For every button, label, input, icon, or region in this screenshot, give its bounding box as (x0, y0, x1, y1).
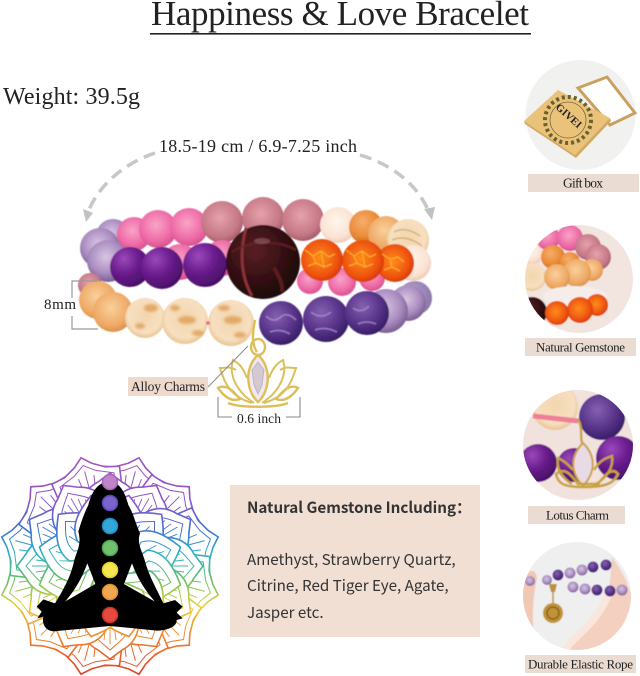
center tiger eye bead (226, 225, 300, 299)
natural gemstone label (525, 338, 636, 356)
back strand beads (80, 197, 431, 296)
lower strand beads (78, 273, 432, 346)
gift box image: GIVEI (553, 102, 583, 131)
lotus charm label (528, 506, 625, 524)
meditating silhouette (37, 482, 183, 631)
length dimension label: 18.5-19 cm / 6.9-7.25 inch (159, 136, 357, 156)
chakra dots (102, 474, 118, 622)
alloy charms callout: Alloy Charms (131, 379, 205, 394)
lotus charm close-up image (523, 390, 633, 500)
panel: gemstone info (230, 485, 480, 637)
gift box label (528, 174, 639, 192)
gemstone close-up image (517, 224, 634, 334)
8mm bracket: 8mm (44, 297, 76, 313)
feature: lotus charm (523, 390, 633, 524)
0.6 inch bracket (218, 397, 300, 426)
feature: lotus charm: Lotus Charm (546, 508, 609, 522)
elastic rope close-up image (523, 542, 631, 650)
arrow: right length arc (360, 155, 435, 220)
0.6 inch bracket: 0.6 inch (237, 411, 281, 426)
panel heading: Natural Gemstone Including： (247, 496, 471, 518)
front strand beads (110, 239, 414, 289)
feature: elastic rope (519, 541, 636, 673)
weight label: Weight: 39.5g (3, 84, 140, 110)
feature: natural gemstone (517, 224, 636, 356)
panel body text: Jasper etc. (247, 601, 324, 623)
lotus charm pendant (218, 320, 298, 407)
panel body text: Citrine, Red Tiger Eye, Agate, (247, 574, 449, 596)
8mm bracket (44, 281, 98, 329)
rainbow mandala (0, 450, 225, 676)
arrow: left length arc (83, 153, 155, 222)
panel body text: Amethyst, Strawberry Quartz, (247, 548, 456, 570)
feature: natural gemstone: Natural Gemstone (536, 340, 625, 354)
feature: elastic rope: Durable Elastic Rope (528, 656, 633, 672)
panel body text (247, 548, 456, 623)
feature: gift box: Gift box (563, 176, 603, 190)
feature: gift box (524, 60, 639, 192)
chakra mandala illustration (0, 450, 225, 676)
bracelet photo (78, 197, 432, 346)
durable elastic rope label (525, 655, 636, 673)
alloy charms callout (128, 346, 248, 396)
